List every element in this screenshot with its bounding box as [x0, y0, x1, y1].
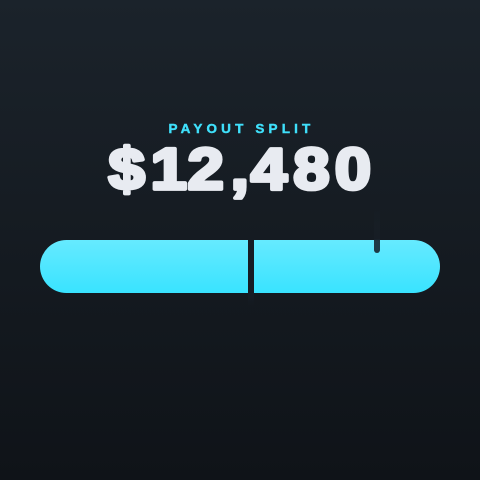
bar fill — [40, 240, 440, 293]
label: payout split: PAYOUT SPLIT — [168, 121, 314, 136]
amount: $12,480: $12,480 — [109, 137, 371, 202]
split divider — [248, 240, 254, 306]
payout split bar — [40, 208, 440, 306]
marker tick — [374, 208, 380, 253]
